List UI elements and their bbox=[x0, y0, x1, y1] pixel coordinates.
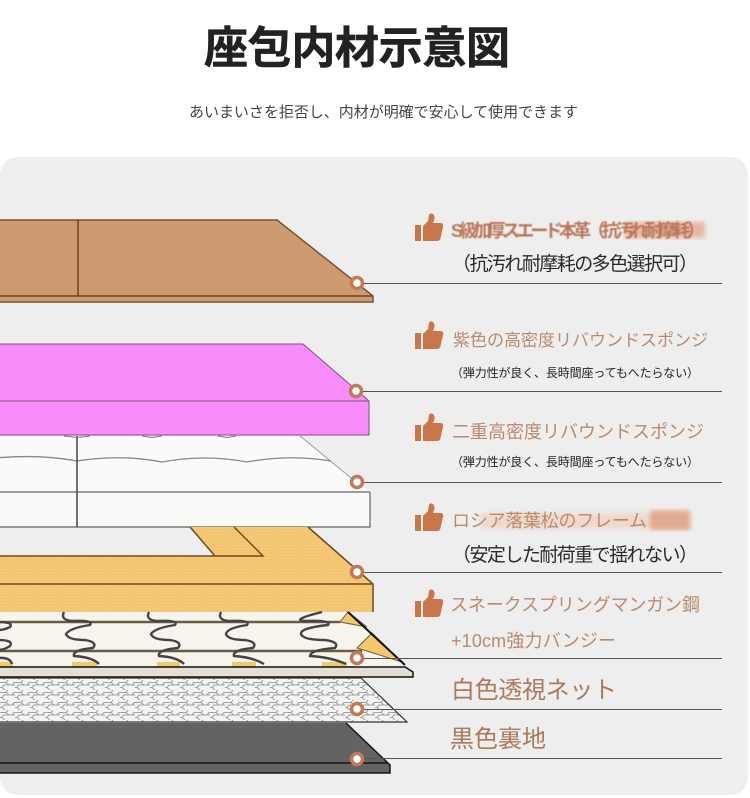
label: bungee: +10cm強力バンジー bbox=[451, 631, 616, 651]
label: double foam heading: 二重高密度リバウンドスポンジ bbox=[452, 422, 704, 442]
panel: grey background bbox=[0, 157, 748, 795]
icon: thumb 5 bbox=[415, 589, 443, 617]
markers bbox=[350, 278, 362, 764]
leader lines bbox=[362, 284, 722, 758]
title: 座包内材示意図 bbox=[204, 24, 510, 73]
label: purple foam note: （弾力性が良く、長時間座ってもへたらない） bbox=[451, 365, 699, 380]
label: purple foam heading: 紫色の高密度リバウンドスポンジ bbox=[453, 331, 708, 350]
layer: brown leather bbox=[0, 220, 373, 302]
label: double foam note: （弾力性が良く、長時間座ってもへたらない） bbox=[451, 454, 699, 469]
layer: white mesh bbox=[0, 678, 407, 722]
layer: larch frame bbox=[0, 527, 373, 612]
layer: black backing bbox=[0, 723, 390, 773]
label: spring heading: スネークスプリングマンガン鋼 bbox=[450, 595, 700, 615]
icon: thumb 4 bbox=[415, 503, 443, 531]
icon: thumb 2 bbox=[415, 321, 443, 349]
label: white mesh: 白色透視ネット bbox=[451, 677, 617, 704]
icon: thumb 3 bbox=[415, 413, 443, 441]
label: frame note: （安定した耐荷重で揺れない） bbox=[452, 544, 698, 566]
label: leather note: （抗汚れ耐摩耗の多色選択可） bbox=[452, 253, 698, 275]
label: black backing: 黒色裏地 bbox=[450, 726, 546, 753]
subtitle: あいまいさを拒否し、内材が明確で安心して使用できます bbox=[189, 104, 578, 121]
layer: snake springs bbox=[0, 612, 413, 677]
layer: white foam bbox=[0, 436, 370, 527]
label: leather heading: S級加厚スエード本革（抗汚れ耐摩耗） bbox=[451, 220, 705, 241]
layer: purple foam bbox=[0, 344, 369, 435]
label: frame heading: ロシア落葉松のフレーム bbox=[452, 511, 647, 531]
icon: thumb 1 bbox=[415, 213, 443, 241]
